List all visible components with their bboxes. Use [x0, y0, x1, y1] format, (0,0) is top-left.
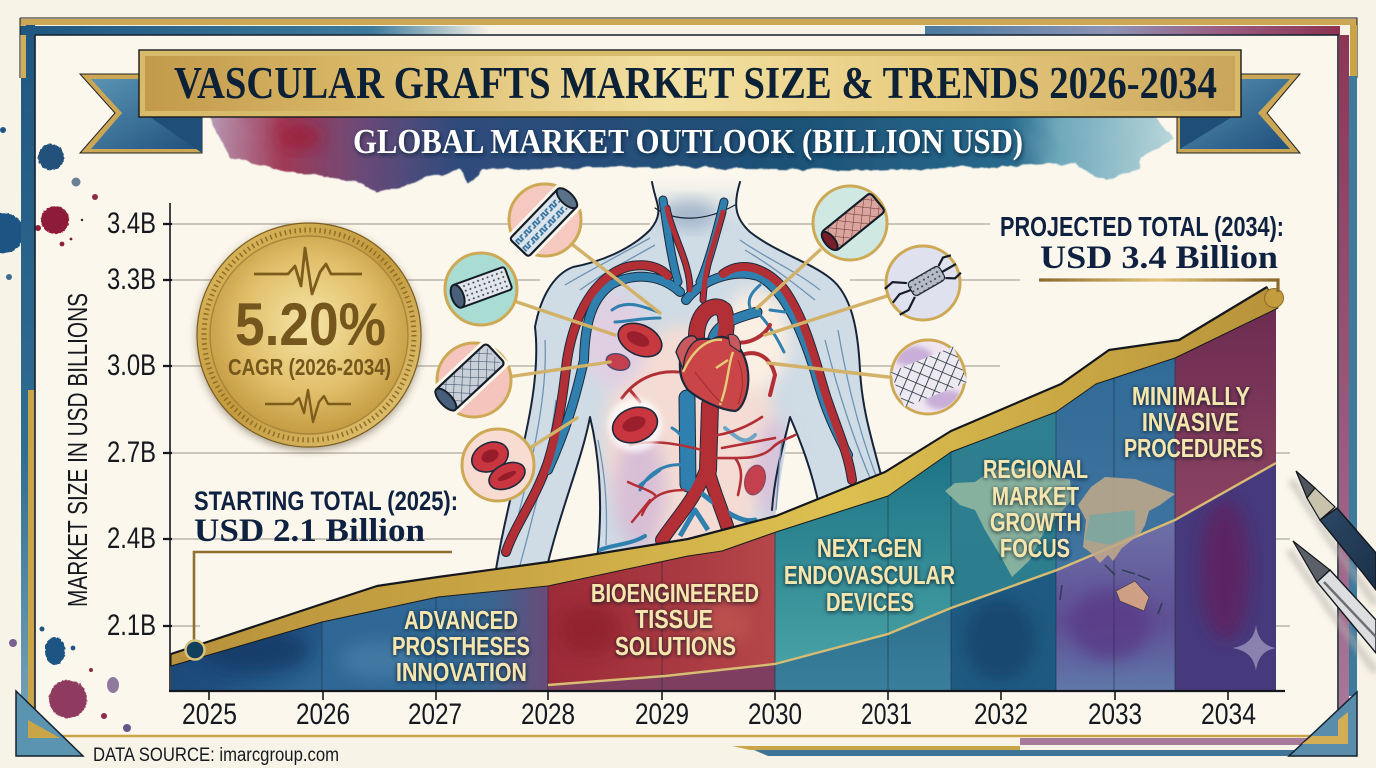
- x axis labels: 2029: [635, 698, 689, 731]
- icon: open stent circle: [890, 340, 968, 414]
- red arteries: [506, 208, 852, 552]
- blue veins: [548, 200, 848, 550]
- area chart: watercolor columns: [171, 290, 1276, 695]
- x axis labels: 2026: [296, 698, 350, 731]
- segment label: advanced prostheses: ADVANCED: [404, 605, 518, 635]
- red blood cell: middle: [608, 398, 662, 452]
- callout: starting total: STARTING TOTAL (2025):: [194, 486, 458, 516]
- y axis labels: 2.1B: [107, 609, 156, 642]
- icon: mesh graft tube circle: [813, 186, 887, 260]
- callout: projected total: USD 3.4 Billion: [1040, 240, 1278, 276]
- chart gridlines: [172, 224, 1290, 626]
- CAGR value: 5.20%: [235, 291, 386, 358]
- red blood cell: right lower: [741, 463, 769, 497]
- segment label: bioengineered tissue: TISSUE: [635, 604, 713, 634]
- skin contour strokes: [495, 182, 885, 575]
- x axis labels: 2031: [861, 698, 912, 731]
- segment label: endovascular: ENDOVASCULAR: [784, 560, 955, 590]
- gold leader lines: [508, 245, 888, 448]
- heart: [676, 334, 748, 411]
- callout: starting total: [186, 486, 458, 660]
- x axis: [169, 691, 1285, 731]
- icon: woven graft tube circle: [429, 338, 511, 417]
- x axis labels: 2033: [1088, 698, 1142, 731]
- x axis labels: 2028: [521, 698, 575, 731]
- x axis labels: 2030: [748, 698, 802, 731]
- segment label: advanced prostheses: PROSTHESES: [392, 631, 530, 661]
- icon: heartbeat bottom: [265, 390, 351, 422]
- red blood cell: left upper: [613, 317, 667, 363]
- title banner: [139, 50, 1241, 117]
- title text: VASCULAR GRAFTS MARKET SIZE & TRENDS 2026-2034: [174, 58, 1217, 108]
- icon: branched stent circle: [884, 246, 964, 320]
- world map: [945, 468, 1175, 614]
- y axis labels: 3.4B: [107, 207, 156, 240]
- 2025 marker: [186, 640, 204, 660]
- segment label: regional growth: GROWTH: [990, 507, 1081, 537]
- data source: DATA SOURCE: imarcgroup.com: [93, 745, 339, 766]
- x axis labels: 2027: [408, 698, 462, 731]
- arm streaks: [512, 238, 876, 565]
- segment label: minimally invasive: INVASIVE: [1142, 407, 1239, 437]
- segment label: regional growth: MARKET: [992, 481, 1079, 511]
- red blood cell: small: [604, 351, 632, 373]
- segment label: bioengineered tissue: BIOENGINEERED: [591, 578, 759, 608]
- ink splatters: bottom left: [9, 626, 131, 732]
- segment label: minimally invasive: [1124, 381, 1263, 463]
- x axis labels: 2025: [182, 698, 237, 731]
- y axis labels: 2.4B: [107, 522, 156, 555]
- body illustration: [495, 172, 885, 575]
- y axis labels: [107, 207, 156, 642]
- right ribbon tail: [1177, 74, 1300, 153]
- y axis: [107, 203, 172, 691]
- vessel outlines: [506, 200, 852, 552]
- subtitle: GLOBAL MARKET OUTLOOK (BILLION USD): [353, 122, 1023, 161]
- segment label: bioengineered tissue: [591, 578, 759, 661]
- x axis labels: 2032: [974, 698, 1028, 731]
- segment label: regional growth: FOCUS: [1000, 533, 1070, 563]
- x axis labels: 2034: [1201, 698, 1256, 731]
- icon: heartbeat top: [254, 248, 362, 294]
- segment label: minimally invasive: MINIMALLY: [1132, 381, 1250, 411]
- segment label: regional growth: REGIONAL: [983, 454, 1088, 484]
- icon: sparkle: [1232, 625, 1276, 671]
- segment label: endovascular: NEXT-GEN: [817, 533, 922, 563]
- segment label: advanced prostheses: INNOVATION: [396, 657, 527, 687]
- subtitle watercolor wash: [204, 112, 1175, 192]
- icon: red blood cells circle: [462, 429, 534, 501]
- lower wash: [548, 460, 1276, 695]
- thin gold trend line: [548, 463, 1276, 685]
- callout: projected total: PROJECTED TOTAL (2034):: [1000, 211, 1284, 242]
- icon: patterned graft tube circle: [505, 182, 583, 261]
- segment label: minimally invasive: PROCEDURES: [1124, 433, 1263, 463]
- segment label: regional growth: [983, 454, 1088, 563]
- y axis labels: 3.0B: [107, 349, 156, 382]
- left ribbon tail: [80, 74, 202, 153]
- y axis title: MARKET SIZE IN USD BILLIONS: [62, 293, 93, 607]
- CAGR label: CAGR (2026-2034): [228, 354, 391, 380]
- column dividers: [322, 340, 1175, 691]
- callout: starting total: USD 2.1 Billion: [194, 513, 425, 549]
- y axis labels: 2.7B: [107, 436, 156, 469]
- segment label: bioengineered tissue: SOLUTIONS: [615, 631, 736, 661]
- 2034 marker: [1264, 288, 1284, 308]
- torso and arms silhouette fill: [495, 172, 885, 575]
- segment label: endovascular: [784, 533, 955, 617]
- icon: perforated graft tube circle: [445, 253, 517, 325]
- y axis labels: 3.3B: [107, 263, 156, 296]
- icon: fountain pens: [1289, 471, 1376, 672]
- segment label: endovascular: DEVICES: [826, 587, 914, 617]
- x axis labels: [182, 698, 1256, 731]
- segment label: advanced prostheses: [392, 605, 530, 687]
- chest tint: [583, 200, 797, 555]
- coin: CAGR badge: [197, 223, 421, 447]
- gold trend band: [171, 287, 1278, 666]
- blue inner iliac chevron: [680, 510, 708, 536]
- callout: projected total: [1000, 211, 1284, 292]
- ink splatters: left: [0, 127, 98, 280]
